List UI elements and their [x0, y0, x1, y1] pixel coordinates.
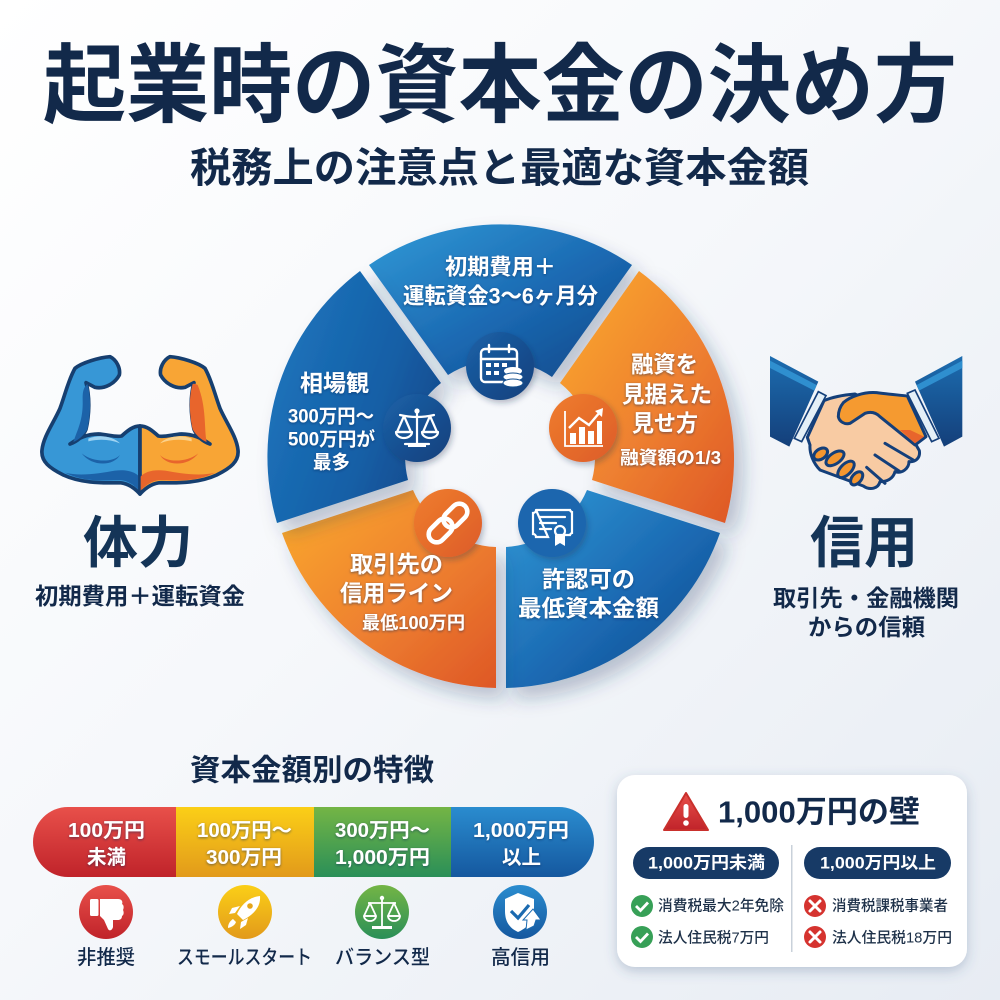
rating: small start: [177, 885, 312, 969]
label: market norm: 300万円〜: [288, 406, 374, 428]
label: loan presentation: 見据えた: [622, 381, 712, 407]
label: top segment: [403, 254, 598, 308]
label: credit line: [340, 551, 465, 633]
segment: loan presentation: [560, 271, 734, 523]
panel heading: 1,000万円の壁: [718, 794, 920, 830]
bar labels: 100万円〜: [197, 820, 292, 842]
title: 起業時の資本金の決め方: [43, 38, 957, 134]
sleeves and cuffs: [770, 356, 962, 447]
label: balanced: バランス型: [335, 946, 430, 969]
bar labels: 1,000万円: [335, 847, 430, 869]
label: credit line: 信用ライン: [340, 580, 453, 606]
caption: stamina: 初期費用＋運転資金: [35, 583, 245, 609]
label: loan presentation: 融資額の1/3: [620, 448, 721, 468]
list item: consumption tax exempt: [631, 895, 784, 917]
bar segment: 1M to 3M: [176, 807, 314, 877]
caption: credibility: 取引先・金融機関: [773, 585, 959, 611]
icon: balance scale: [383, 394, 451, 462]
icon: handshake: [770, 356, 962, 489]
bar labels: 未満: [87, 846, 126, 869]
icon: shield: [493, 885, 547, 939]
label: not recommended: 非推奨: [77, 946, 135, 969]
label: top segment: 初期費用＋: [445, 254, 556, 280]
segment: minimum capital for permits: [506, 490, 720, 688]
label: market norm: 最多: [313, 452, 350, 474]
label: high credibility: 高信用: [491, 946, 550, 969]
icon: growth chart: [549, 394, 617, 462]
icon: calendar and coins: [466, 332, 534, 400]
list item: resident tax 180k: [804, 926, 952, 948]
list item: resident tax 70k: [631, 926, 769, 948]
label: permits: 許認可の: [542, 566, 635, 592]
panel: 10 million yen wall: [617, 775, 967, 967]
rating: not recommended: [77, 885, 135, 969]
label: credit line: 最低100万円: [362, 613, 465, 633]
label: credit line: 取引先の: [350, 551, 443, 577]
heading: stamina: 体力: [83, 512, 193, 574]
pill: under 10M: [633, 847, 779, 879]
icon: flexed arms: [42, 357, 238, 494]
icon: warning triangle: [664, 793, 708, 830]
list item: resident tax 70k: 法人住民税7万円: [658, 930, 769, 946]
list item: consumption taxpayer: 消費税課税事業者: [832, 898, 948, 914]
capital range bar: [33, 807, 594, 877]
icon: balance scale: [355, 885, 409, 939]
segment: business partner credit line: [282, 490, 496, 688]
list item: resident tax 180k: 法人住民税18万円: [832, 930, 952, 946]
caption: credibility: [773, 585, 959, 640]
right column: credibility: [770, 356, 962, 640]
label: loan presentation: 見せ方: [632, 410, 698, 436]
bar segment: under 1M: [33, 807, 176, 877]
pill: over 10M: [804, 847, 951, 879]
bar labels: 以上: [502, 846, 541, 869]
label: market norm: [288, 370, 375, 474]
segment: market norm: [267, 271, 441, 523]
label: permits: [518, 566, 659, 621]
label: top segment: 運転資金3〜6ヶ月分: [403, 284, 598, 308]
list item: consumption tax exempt: 消費税最大2年免除: [658, 896, 784, 914]
label: market norm: 500万円が: [288, 428, 375, 450]
section heading: characteristics by capital amount: 資本金額別の特徴: [190, 754, 434, 788]
list item: consumption taxpayer: [804, 895, 948, 917]
label: loan presentation: [620, 351, 721, 468]
bar labels: 1,000万円: [473, 820, 569, 842]
heading: credibility: 信用: [810, 512, 918, 574]
rating: balanced: [335, 885, 430, 969]
pie diagram: capital decision factors: [267, 224, 734, 688]
pie labels: [288, 254, 721, 633]
icon: rocket: [218, 885, 272, 939]
bar segment: 3M to 10M: [314, 807, 451, 877]
icon: thumbs down: [79, 885, 133, 939]
icon: chain link: [414, 489, 482, 557]
bar labels: 100万円: [68, 820, 145, 842]
bar labels: [68, 820, 569, 869]
pill: over 10M: 1,000万円以上: [820, 854, 936, 872]
icon: certificate: [518, 489, 586, 557]
bar labels: 300万円: [206, 847, 282, 869]
hands: [807, 393, 926, 489]
label: permits: 最低資本金額: [518, 595, 659, 621]
bar labels: 300万円〜: [335, 820, 430, 842]
segment: initial costs plus working capital: [369, 224, 632, 377]
label: small start: スモールスタート: [177, 946, 312, 969]
pill: under 10M: 1,000万円未満: [648, 852, 765, 872]
label: market norm: 相場観: [300, 370, 369, 396]
rating: high credibility: [491, 885, 550, 969]
caption: credibility: からの信頼: [808, 614, 925, 640]
subtitle: 税務上の注意点と最適な資本金額: [190, 145, 809, 191]
bar segment: over 10M: [451, 807, 594, 877]
left column: stamina: [35, 357, 245, 609]
label: loan presentation: 融資を: [631, 351, 698, 377]
